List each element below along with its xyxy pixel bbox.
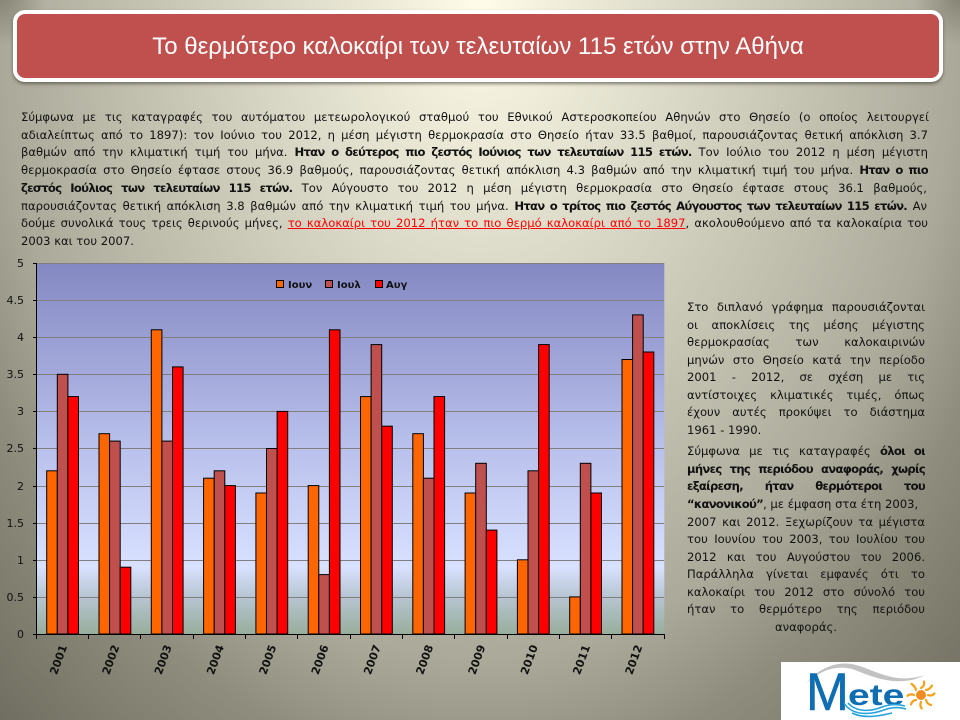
y axis labels: 1.5 <box>6 517 24 530</box>
side text block: του Ιουνίου του 2003, του Ιουλίου του <box>687 532 925 546</box>
y axis labels: 4 <box>17 331 24 344</box>
bars 2012 <box>622 315 654 634</box>
y axis labels: 3.5 <box>6 368 24 381</box>
logo wordmark: ete <box>848 679 904 712</box>
logo sun <box>908 682 934 708</box>
y axis labels: 4.5 <box>6 294 24 307</box>
y axis labels: 5 <box>17 257 24 270</box>
y axis labels <box>6 257 24 641</box>
side text block: “κανονικού”, με έμφαση στα έτη 2003, <box>687 497 918 511</box>
side text block: καλοκαίρι του 2012 στο σύνολό του <box>687 585 925 599</box>
intro text block: αδιαλείπτως από το 1897): τον Ιούνιο του 2012, η μέση μέγιστη θερμοκρασία στο Θησείο ήταν 33.5 βαθμοί, παρουσιάζοντας θετική απόκλιση 3.7 <box>21 128 928 142</box>
side text block <box>687 300 925 634</box>
y axis labels: 2.5 <box>6 442 24 455</box>
bars 2011 <box>570 463 602 634</box>
y axis labels: 0.5 <box>6 591 24 604</box>
x axis year labels: 2005 <box>257 643 279 676</box>
side text block: αντίστοιχες κλιματικές τιμές, όπως <box>687 388 925 402</box>
side text block: θερμοκρασίας των καλοκαιρινών <box>687 335 925 349</box>
side text block: ήταν το θερμότερο της περιόδου <box>687 602 925 616</box>
intro text block: δούμε συνολικά τους τρεις θερινούς μήνες, το καλοκαίρι του 2012 ήταν το πιο θερμό καλοκαίρι από το 1897, ακολουθούμενο από τα καλοκαίρια του <box>21 216 928 230</box>
bars 2005 <box>256 411 288 634</box>
y axis labels: 3 <box>17 405 24 418</box>
logo wordmark <box>806 663 904 720</box>
legend: Αυγ <box>386 280 407 291</box>
y axis labels: 2 <box>17 480 24 493</box>
x axis year labels: 2004 <box>204 643 227 676</box>
side text block: Παράλληλα γίνεται εμφανές ότι το <box>687 567 925 581</box>
legend <box>276 280 407 291</box>
side text block: 2001 - 2012, σε σχέση με τις <box>687 370 925 384</box>
title banner <box>13 10 943 82</box>
logo waves <box>844 703 906 716</box>
x axis year labels: 2009 <box>466 643 488 676</box>
x axis year labels: 2008 <box>413 643 436 676</box>
x axis year labels: 2003 <box>152 643 175 676</box>
side text block: Σύμφωνα με τις καταγραφές όλοι οι <box>687 444 925 458</box>
side text block: 1961 - 1990. <box>687 423 761 437</box>
intro text block: βαθμών από την κλιματική τιμή του μήνα. Ηταν ο δεύτερος πιο ζεστός Ιούνιος των τελευταίων 115 ετών. Τον Ιούλιο του 2012 η μέση μέγιστη <box>21 145 928 159</box>
bars 2002 <box>99 434 131 634</box>
bars 2006 <box>308 330 340 634</box>
bars 2001 <box>47 374 78 634</box>
intro text block: 2003 και του 2007. <box>21 234 134 248</box>
legend: Ιουν <box>288 280 312 291</box>
bars 2008 <box>413 397 445 634</box>
intro text block: παρουσιάζοντας θετική απόκλιση 3.8 βαθμών από την κλιματική τιμή του μήνα. Ηταν ο τρίτος πιο ζεστός Αύγουστος των τελευταίων 115 ετών. Αν <box>21 199 927 213</box>
x axis year labels: 2010 <box>518 643 541 676</box>
bars 2003 <box>151 330 183 634</box>
bars <box>47 315 654 634</box>
bars 2009 <box>465 463 497 634</box>
bar chart <box>6 257 665 676</box>
bars 2010 <box>517 345 549 634</box>
x axis year labels: 2002 <box>100 643 122 676</box>
title banner: Το θερμότερο καλοκαίρι των τελευταίων 115 ετών στην Αθήνα <box>152 33 804 60</box>
side text block: οι αποκλίσεις της μέσης μέγιστης <box>687 318 925 332</box>
side text block: μήνες της περιόδου αναφοράς, χωρίς <box>687 462 925 476</box>
x axis year labels: 2011 <box>570 643 593 676</box>
logo grey swoosh <box>806 664 925 684</box>
logo: Meteo <box>781 662 960 720</box>
bars 2007 <box>360 345 392 634</box>
x axis year labels: 2006 <box>309 643 332 676</box>
intro text block: θερμοκρασία στο Θησείο έφτασε στους 36.9 βαθμούς, παρουσιάζοντας θετική απόκλιση 4.3 βαθμών από την κλιματική τιμή του μήνα. Ηταν ο πιο <box>21 163 928 177</box>
x axis year labels: 2001 <box>47 643 70 676</box>
intro text block <box>21 110 929 248</box>
y axis labels: 1 <box>17 554 24 567</box>
x axis year labels: 2007 <box>361 643 384 676</box>
side text block: έχουν αυτές προκύψει το διάστημα <box>687 405 925 419</box>
y axis labels: 0 <box>17 628 24 641</box>
x axis year labels: 2012 <box>623 643 645 676</box>
side text block: Στο διπλανό γράφημα παρουσιάζονται <box>687 300 925 314</box>
axes and ticks <box>33 263 664 639</box>
side text block: μηνών στο Θησείο κατά την περίοδο <box>687 353 925 367</box>
x axis year labels <box>47 643 645 676</box>
legend: Ιουλ <box>337 280 361 291</box>
side text block: αναφοράς. <box>775 620 837 634</box>
bars 2004 <box>204 471 235 634</box>
side text block: 2007 και 2012. Ξεχωρίζουν τα μέγιστα <box>687 515 925 529</box>
intro text block: Σύμφωνα με τις καταγραφές του αυτόματου μετεωρολογικού σταθμού του Εθνικού Αστεροσκοπείου Αθηνών στο Θησείο (ο οποίος λειτουργεί <box>21 110 929 124</box>
intro text block: ζεστός Ιούλιος των τελευταίων 115 ετών. Τον Αύγουστο του 2012 η μέση μέγιστη θερμοκρασία στο Θησείο έφτασε στους 36.1 βαθμούς, <box>21 181 927 195</box>
side text block: 2012 και του Αυγούστου του 2006. <box>687 550 925 564</box>
plot area <box>36 263 664 634</box>
side text block: εξαίρεση, ήταν θερμότεροι του <box>687 479 925 493</box>
